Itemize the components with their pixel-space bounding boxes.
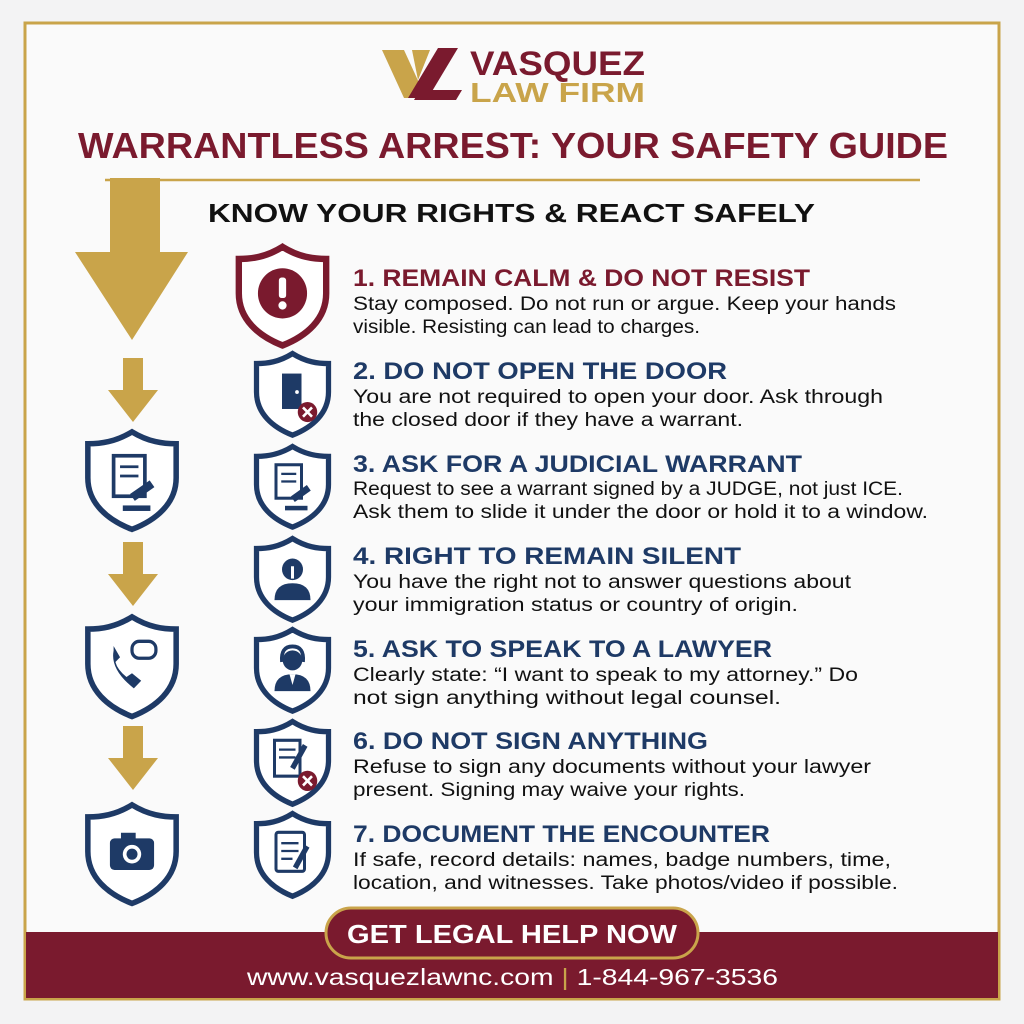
step 6: present. Signing may waive your rights. — [353, 780, 745, 801]
left flow column — [75, 178, 188, 903]
step 1: visible. Resisting can lead to charges. — [353, 317, 700, 338]
step 7: If safe, record details: names, badge numbers, time, — [353, 850, 891, 871]
step 6: 6. DO NOT SIGN ANYTHING — [353, 728, 708, 755]
icon: no sign shield — [256, 722, 328, 804]
cta button — [326, 908, 698, 958]
step 2: 2. DO NOT OPEN THE DOOR — [353, 358, 727, 385]
logo: LAW FIRM — [470, 77, 645, 108]
step 7 — [256, 814, 898, 896]
step 1: Stay composed. Do not run or argue. Keep your hands — [353, 294, 896, 315]
cta button: GET LEGAL HELP NOW — [347, 919, 678, 949]
step 2 — [256, 354, 883, 435]
step 5: Clearly state: “I want to speak to my attorney.” Do — [353, 665, 858, 686]
step 5: not sign anything without legal counsel. — [353, 688, 781, 709]
step 1 — [239, 247, 896, 345]
title: WARRANTLESS ARREST: YOUR SAFETY GUIDE — [78, 125, 948, 166]
logo: VASQUEZ — [470, 45, 645, 83]
step 6 — [256, 722, 872, 804]
contact line: www.vasquezlawnc.com | 1-844-967-3536 — [246, 964, 778, 990]
icon: door shield — [256, 354, 328, 435]
step 4: You have the right not to answer questions about — [353, 572, 852, 593]
step 3: Ask them to slide it under the door or hold it to a window. — [353, 502, 928, 523]
step 2: the closed door if they have a warrant. — [353, 410, 743, 431]
icon: notes shield — [256, 814, 328, 896]
step 3: 3. ASK FOR A JUDICIAL WARRANT — [353, 451, 802, 478]
step 4: your immigration status or country of origin. — [353, 595, 798, 616]
step 7: location, and witnesses. Take photos/video if possible. — [353, 873, 898, 894]
icon: lawyer shield — [256, 630, 328, 711]
step 4 — [256, 539, 852, 620]
step 2: You are not required to open your door. Ask through — [353, 387, 883, 408]
shield: camera left — [88, 805, 176, 903]
icon: silent shield — [256, 539, 328, 620]
step 3 — [256, 447, 928, 527]
arrow: small 3 — [108, 726, 158, 790]
step 4: 4. RIGHT TO REMAIN SILENT — [353, 543, 741, 570]
shield: warrant left — [88, 432, 176, 529]
icon: warrant shield — [256, 447, 328, 527]
icon: alert shield — [239, 247, 326, 345]
shield: phone left — [88, 617, 176, 717]
step 1: 1. REMAIN CALM & DO NOT RESIST — [353, 265, 810, 292]
step 3: Request to see a warrant signed by a JUDGE, not just ICE. — [353, 479, 903, 500]
step 7: 7. DOCUMENT THE ENCOUNTER — [353, 821, 770, 848]
arrow: big — [75, 178, 188, 340]
arrow: small 1 — [108, 358, 158, 422]
subtitle: KNOW YOUR RIGHTS & REACT SAFELY — [208, 198, 815, 228]
footer band — [26, 908, 998, 998]
step 6: Refuse to sign any documents without your lawyer — [353, 757, 872, 778]
logo — [382, 45, 645, 108]
step 5: 5. ASK TO SPEAK TO A LAWYER — [353, 636, 772, 663]
step 5 — [256, 630, 858, 711]
arrow: small 2 — [108, 542, 158, 606]
